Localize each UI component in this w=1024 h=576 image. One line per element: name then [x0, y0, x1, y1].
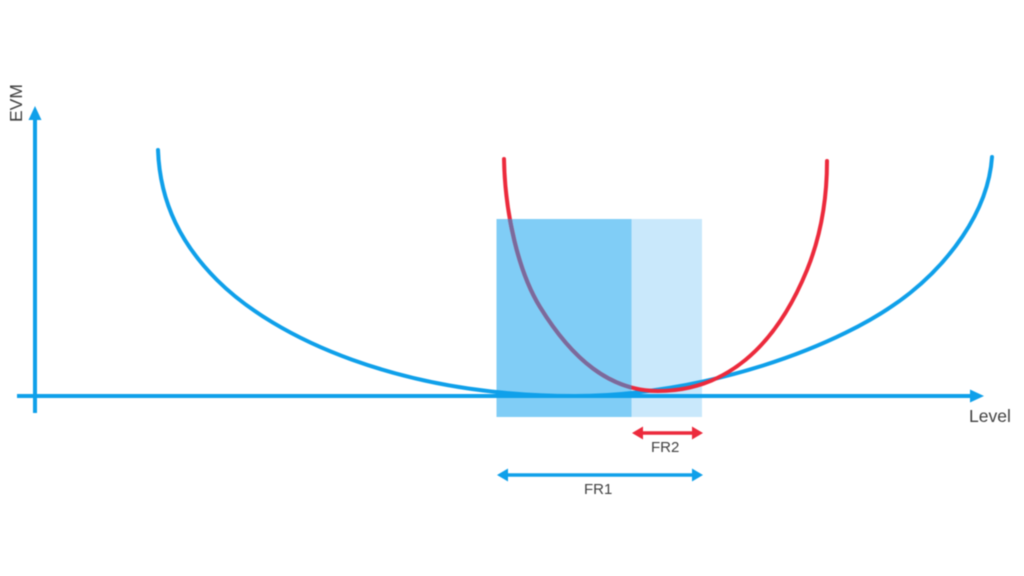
axis: horizontal level axis with arrow: [17, 390, 984, 402]
arrow: FR2 range: [632, 426, 703, 440]
curve: red curve overlap with band: [508, 218, 632, 390]
axis label: EVM: EVM: [6, 84, 26, 122]
label: FR2: FR2: [651, 439, 679, 456]
label: FR1: FR1: [584, 481, 612, 498]
arrow: FR1 range: [497, 468, 703, 482]
curve: blue EVM curve: [158, 150, 992, 396]
axis label: Level: Level: [969, 406, 1011, 426]
axis: vertical EVM axis with arrow: [28, 106, 42, 413]
curve: red EVM curve: [504, 159, 827, 391]
EVM vs level diagram: [9, 84, 1010, 495]
band: FR1 dark region: [496, 219, 632, 417]
band: FR2 light region: [632, 219, 702, 417]
